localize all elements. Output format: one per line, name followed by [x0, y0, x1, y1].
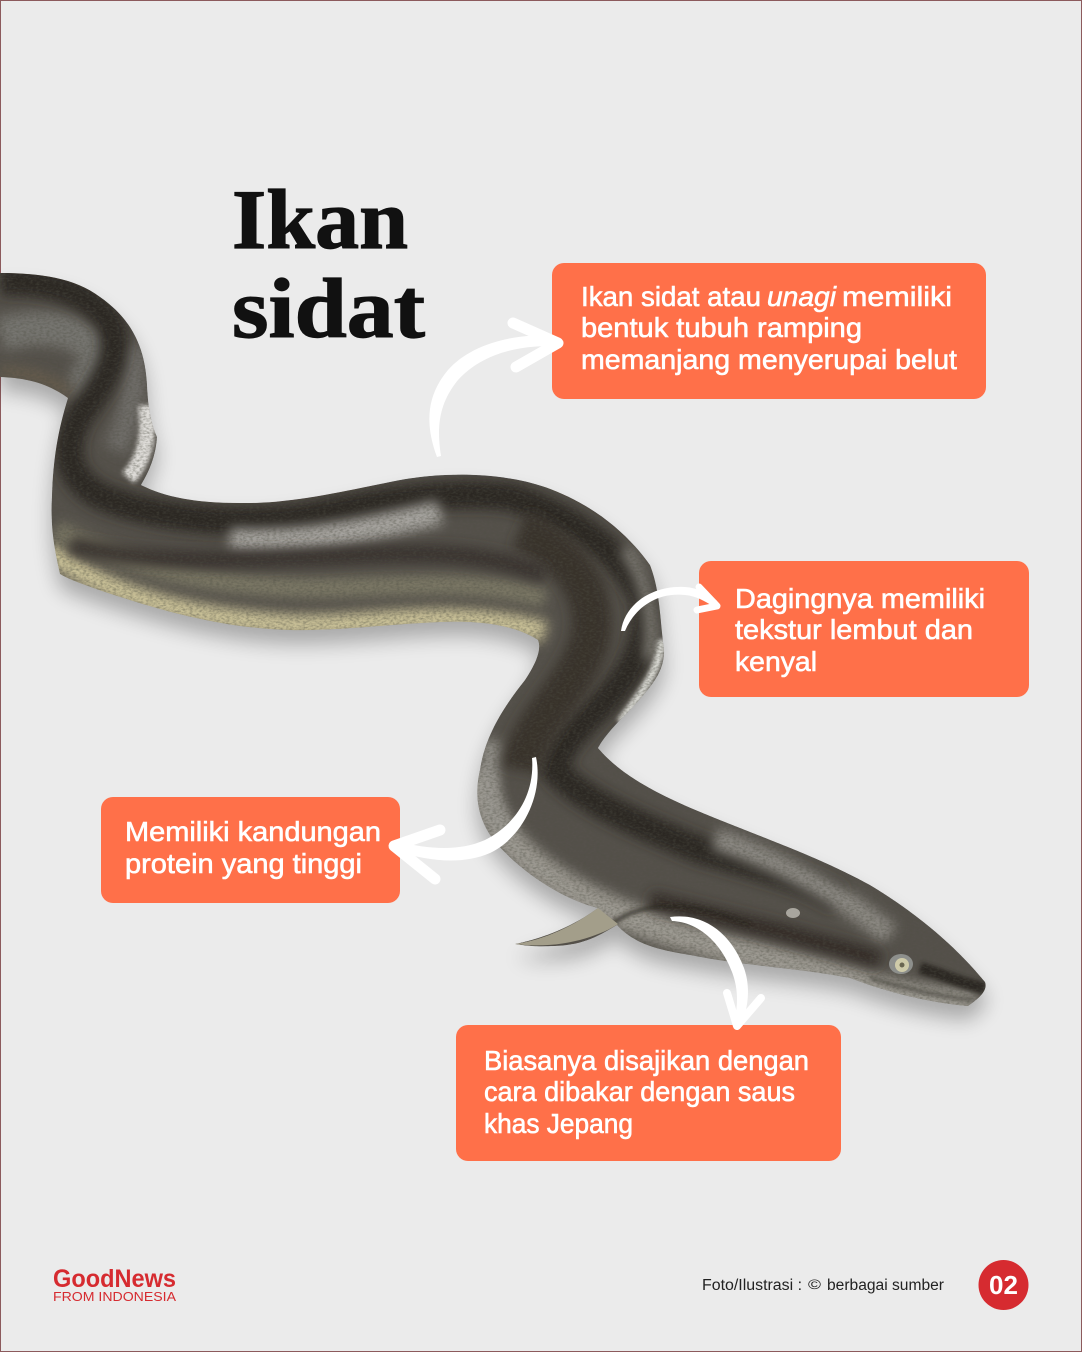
- arrow: to meat texture callout: [621, 587, 717, 631]
- callout: meat texture: [699, 561, 1029, 697]
- photo credit: Foto/Ilustrasi :: [702, 1277, 802, 1294]
- arrow: to body shape callout: [429, 323, 558, 457]
- fin: [515, 908, 618, 945]
- title: [232, 173, 425, 356]
- page number badge: 02: [989, 1270, 1018, 1300]
- arrow: to protein callout: [394, 757, 538, 879]
- callout: serving: [456, 1025, 841, 1161]
- lower body grey: [482, 770, 975, 1006]
- callout: meat texture: kenyal: [735, 646, 817, 677]
- callout: protein: protein yang tinggi: [125, 848, 362, 879]
- lateral pore: [786, 908, 800, 918]
- callout: serving: Biasanya disajikan dengan: [484, 1045, 809, 1076]
- title: sidat: [232, 262, 425, 356]
- photo credit: [702, 1276, 944, 1294]
- pale belly: [48, 550, 545, 632]
- callout: meat texture: Dagingnya memiliki: [735, 583, 985, 614]
- logo: GoodNews from Indonesia: FROM INDONESIA: [53, 1290, 177, 1304]
- callout: body shape: [552, 263, 986, 399]
- page number badge: [978, 1260, 1028, 1310]
- callout: body shape: Ikan sidat atau: [581, 281, 761, 312]
- scale highlight: [230, 512, 440, 541]
- photo credit: berbagai sumber: [827, 1277, 944, 1294]
- callout: body shape: bentuk tubuh ramping: [581, 312, 862, 343]
- neck left flank: [0, 328, 96, 385]
- eye: [889, 954, 913, 974]
- eel photo illustration: [0, 260, 1000, 1020]
- skin texture: [0, 260, 1000, 1020]
- photo credit: ©: [808, 1276, 822, 1292]
- dark dorsal band: [0, 282, 840, 900]
- mid edge highlight: [625, 548, 652, 660]
- logo: GoodNews from Indonesia: [53, 1265, 177, 1304]
- title: Ikan: [232, 173, 408, 267]
- callout: body shape: memiliki: [842, 281, 952, 312]
- callout: body shape: memanjang menyerupai belut: [581, 344, 957, 375]
- callout: meat texture: tekstur lembut dan: [735, 614, 973, 645]
- arrow: to serving callout: [670, 916, 761, 1026]
- callout: protein: Memiliki kandungan: [125, 816, 381, 847]
- logo: GoodNews from Indonesia: GoodNews: [53, 1265, 176, 1293]
- callout: serving: cara dibakar dengan saus: [484, 1076, 795, 1107]
- callout: body shape: unagi: [767, 281, 837, 312]
- callout: protein: [101, 797, 400, 903]
- head highlights: [715, 838, 890, 935]
- callout: serving: khas Jepang: [484, 1108, 633, 1139]
